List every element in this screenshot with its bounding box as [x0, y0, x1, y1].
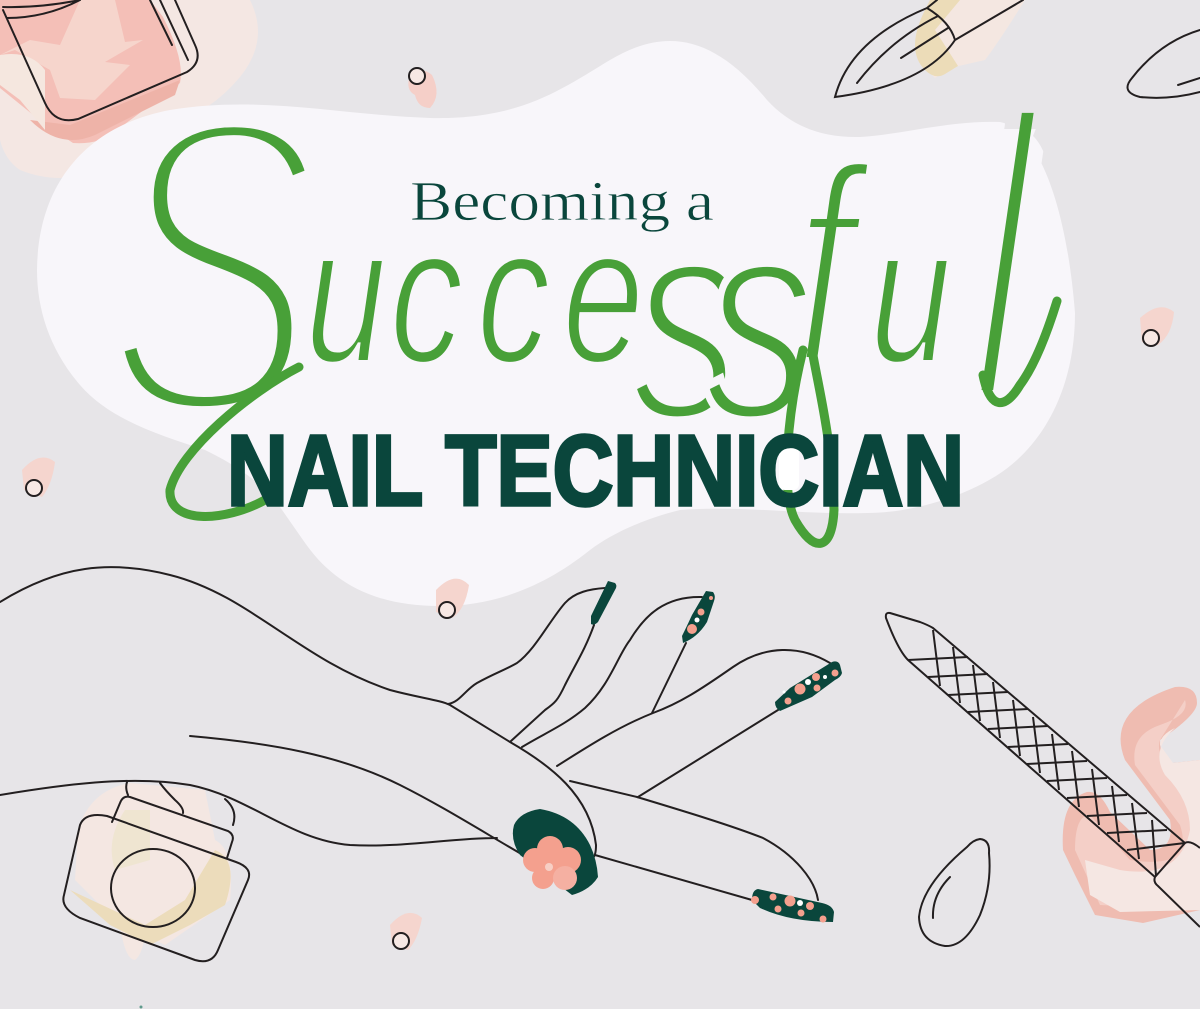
highlight inside letter C	[779, 447, 799, 490]
small bead: bottom	[390, 913, 422, 950]
script word: Successful: c	[477, 186, 550, 404]
paint splash: pot	[70, 783, 231, 960]
script word: Successful: S	[106, 28, 318, 504]
icon: second brush tip	[1128, 30, 1200, 98]
small bead: right	[1140, 307, 1174, 346]
icon: pot	[63, 782, 249, 961]
paint splash: top left	[0, 0, 258, 178]
icon: polish jar	[3, 0, 198, 120]
small bead: top	[408, 68, 437, 108]
icon: nail file	[886, 613, 1200, 927]
script word: Successful: s	[632, 157, 741, 480]
swash: final stroke of l	[983, 301, 1057, 403]
small bead: centre	[436, 579, 469, 618]
script word: Successful: e	[562, 186, 644, 404]
background blob	[37, 41, 1075, 606]
nail: dotted third finger	[775, 661, 842, 711]
thumb nail with flower	[513, 809, 598, 895]
swash: f descender loop	[787, 350, 834, 543]
hand outline	[0, 567, 830, 900]
heading: Becoming a: Becoming a	[410, 171, 714, 233]
script word: Successful: l	[968, 29, 1044, 487]
icon: brush	[835, 0, 1023, 97]
swash: lower S loop	[170, 367, 299, 516]
paint splash: brush	[915, 0, 1025, 78]
small bead: left	[22, 458, 55, 497]
nail: plain green	[591, 581, 616, 625]
script word: Successful: u	[305, 186, 387, 404]
icon: sponge drop	[919, 839, 990, 946]
script word: Successful: f	[795, 110, 872, 422]
script word: Successful: s	[705, 157, 814, 480]
paint splash: file	[1063, 687, 1200, 923]
script word: Successful: c	[390, 186, 463, 404]
heading: Nail Technician: NAIL TECHNICIAN	[227, 415, 964, 527]
flower	[523, 836, 581, 890]
script word: Successful: u	[870, 186, 951, 404]
nail: dotted little finger	[751, 889, 834, 922]
nail: dotted second finger	[682, 591, 715, 643]
